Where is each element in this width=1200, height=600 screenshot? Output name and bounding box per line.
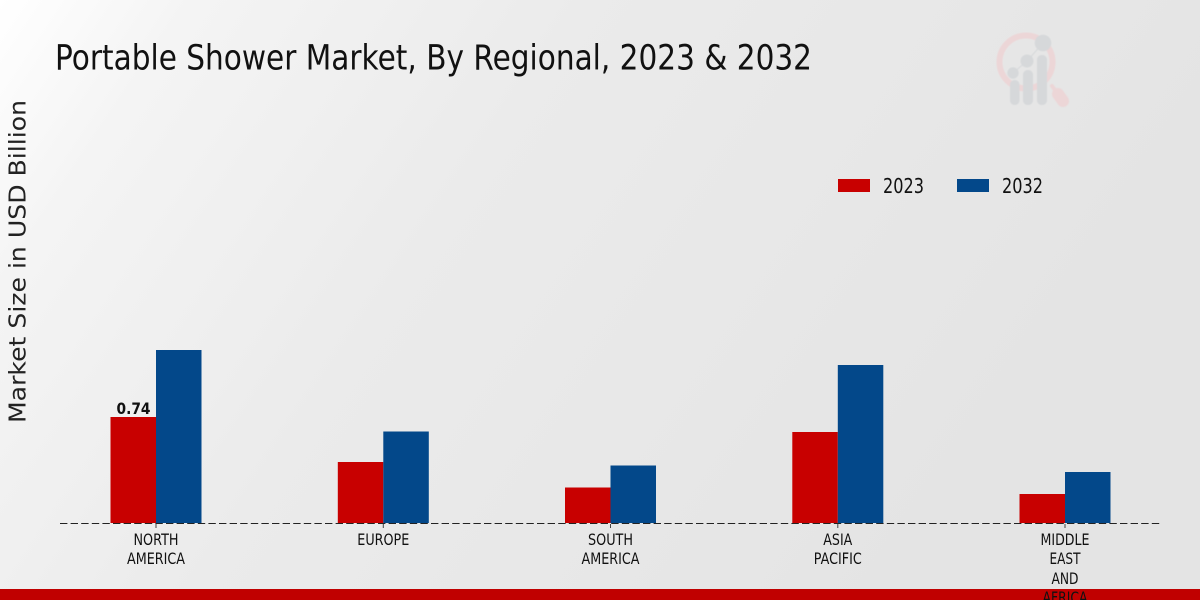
title: Portable Shower Market, By Regional, 2023 & 2032: [55, 38, 812, 78]
label: asia pacific: ASIA: [823, 530, 852, 549]
label: middle east and africa: EAST: [1050, 549, 1081, 568]
legend: 2032: [1002, 174, 1043, 198]
middle east and africa bars: [1020, 472, 1110, 523]
bar chart: [60, 350, 1160, 528]
y axis label: Market Size in USD Billion: [4, 100, 32, 423]
label: north america: AMERICA: [127, 549, 185, 568]
south america bars: [565, 466, 656, 523]
watermark logo: [1000, 35, 1063, 105]
x axis baseline: [60, 522, 1160, 524]
value label 0.74: 0.74: [116, 399, 150, 418]
label: south america: SOUTH: [588, 530, 633, 549]
label: middle east and africa: AND: [1052, 569, 1078, 588]
legend: 2023: [883, 174, 924, 198]
label: south america: [582, 530, 640, 568]
label: south america: AMERICA: [582, 549, 640, 568]
label: north america: NORTH: [134, 530, 178, 549]
label: asia pacific: PACIFIC: [814, 549, 862, 568]
label: middle east and africa: MIDDLE: [1040, 530, 1090, 549]
label: asia pacific: [814, 530, 862, 568]
bottom red bar: [0, 589, 1200, 600]
label: north america: [127, 530, 185, 568]
label: middle east and africa: [1040, 530, 1090, 600]
legend: [838, 174, 1043, 198]
x axis labels: [127, 530, 1090, 600]
label: europe: EUROPE: [357, 530, 409, 549]
europe bars: [338, 432, 429, 523]
asia pacific bars: [792, 365, 883, 523]
north america bars: [110, 350, 202, 523]
